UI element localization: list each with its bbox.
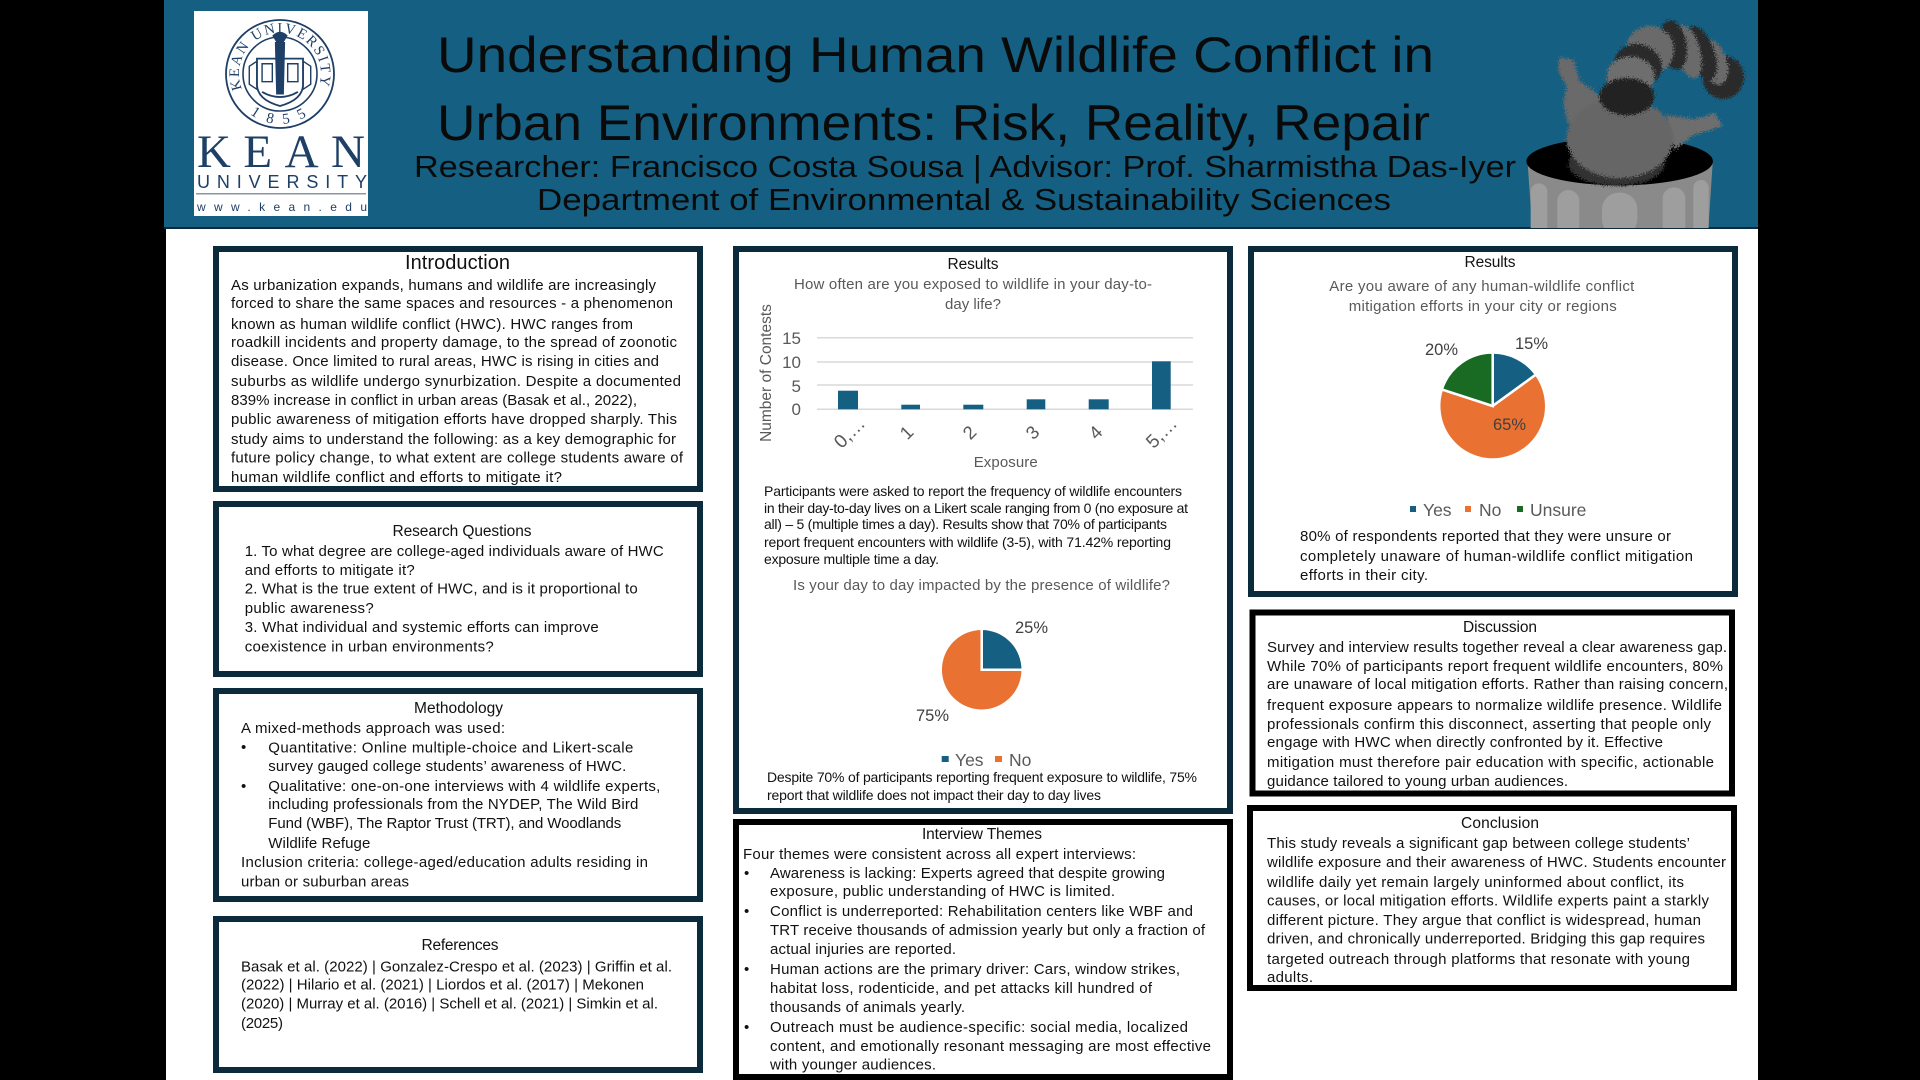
text: methodology body: including professionals from the NYDEP, The Wild Bird — [268, 796, 638, 813]
heading: interview themes: Interview Themes — [922, 826, 1042, 843]
text: discussion body: Survey and interview results together reveal a clear awareness gap. — [1267, 639, 1727, 656]
text: discussion body: engage with HWC when directly confronted by it. Effective — [1267, 734, 1663, 751]
bar chart: exposure to wildlife: 3 — [1021, 421, 1043, 443]
text: interview themes list: exposure, public understanding of HWC is limited. — [770, 883, 1115, 900]
heading: methodology: Methodology — [414, 700, 503, 717]
bar chart: exposure to wildlife: 15 — [782, 329, 801, 348]
heading: research questions: Research Questions — [392, 523, 532, 540]
text: methodology body: A mixed-methods approach was used: — [241, 720, 505, 737]
text: conclusion body — [1266, 835, 1726, 986]
text: exposure findings: Participants were asked to report the frequency of wildlife encounters — [764, 483, 1182, 499]
text: interview themes list: Outreach must be audience-specific: social media, localized — [770, 1019, 1188, 1036]
text: discussion body: While 70% of participants report frequent wildlife encounters, 80% — [1267, 658, 1723, 675]
text: interview themes list: Conflict is underreported: Rehabilitation centers like WBF and — [770, 903, 1193, 920]
text: conclusion body: targeted outreach through platforms that resonate with young — [1267, 951, 1690, 968]
text: methodology body: • — [241, 778, 246, 795]
heading: introduction: Introduction — [405, 252, 510, 274]
logo: Kean University: KEAN UNIVERSITY — [229, 23, 331, 92]
text: introduction body: 839% increase in conflict in urban areas (Basak et al., 2022), — [231, 392, 637, 409]
bar chart: exposure to wildlife — [758, 276, 1193, 471]
text: references list: (2025) — [241, 1015, 283, 1032]
text: references list — [241, 958, 672, 1032]
icon: raccoon in trash can — [1526, 18, 1744, 237]
text: introduction body: disease. Once limited to rural areas, HWC is rising in cities and — [231, 353, 659, 370]
text: impact findings — [767, 769, 1197, 803]
text: methodology body: Inclusion criteria: college-aged/education adults residing in — [241, 854, 648, 871]
text: introduction body: human wildlife conflict and efforts to mitigate it? — [231, 469, 562, 486]
panel: discussion — [1252, 612, 1732, 794]
text: methodology body — [241, 720, 660, 890]
text: methodology body: Wildlife Refuge — [268, 835, 370, 852]
text: references list: (2020) | Murray et al. (2016) | Schell et al. (2021) | Simkin et al. — [241, 996, 658, 1012]
text: interview themes list: actual injuries are reported. — [770, 941, 956, 958]
bar chart: exposure to wildlife: Exposure — [974, 454, 1038, 471]
text: introduction body: As urbanization expands, humans and wildlife are increasingly — [231, 277, 656, 294]
text: discussion body: are unaware of local mitigation efforts. Rather than raising concern, — [1267, 676, 1728, 693]
title: Understanding Human Wildlife Conflict in — [437, 27, 1434, 83]
text: interview themes list: Awareness is lacking: Experts agreed that despite growing — [770, 865, 1165, 882]
heading: conclusion: Conclusion — [1461, 815, 1539, 832]
text: interview themes list — [743, 846, 1211, 1074]
pie chart: mitigation awareness: Are you aware of any human-wildlife conflict — [1329, 278, 1635, 295]
title — [437, 27, 1434, 151]
text: research questions list: 3. What individual and systemic efforts can improve — [245, 619, 599, 636]
text: discussion body — [1267, 639, 1728, 790]
text: methodology body: survey gauged college students’ awareness of HWC. — [268, 758, 626, 775]
logo: Kean University: UNIVERSITY — [197, 172, 367, 192]
text: discussion body: professionals confirm this disconnect, asserting that people only — [1267, 716, 1712, 733]
text: introduction body: suburbs as wildlife undergo synurbization. Despite a documented — [231, 373, 681, 390]
text: interview themes list: • — [744, 903, 749, 920]
bar chart: exposure to wildlife: 4 — [1084, 421, 1106, 443]
text: exposure findings: in their day-to-day lives on a Likert scale ranging from 0 (no exposure at — [764, 500, 1188, 516]
panel: introduction — [216, 249, 700, 489]
researcher and department subtitle: Department of Environmental & Sustainability Sciences — [537, 182, 1391, 217]
text: exposure findings — [764, 483, 1188, 567]
text: methodology body: • — [241, 739, 246, 756]
text: research questions list: 1. To what degree are college-aged individuals aware of HWC — [245, 543, 664, 560]
text: methodology body: Quantitative: Online multiple-choice and Likert-scale — [268, 740, 633, 756]
pie chart: mitigation awareness: 65% — [1493, 416, 1526, 434]
bar chart: exposure to wildlife: 2 — [958, 421, 980, 443]
text: impact findings: report that wildlife does not impact their day to day lives — [767, 787, 1101, 803]
text: conclusion body: adults. — [1267, 969, 1313, 986]
text: exposure findings: all) – 5 (multiple times a day). Results show that 70% of participants — [764, 516, 1167, 532]
pie chart: mitigation awareness: 20% — [1425, 341, 1458, 359]
pie chart: mitigation awareness: mitigation efforts in your city or regions — [1349, 298, 1617, 315]
pie chart: daily impact: Yes — [955, 750, 984, 770]
bar chart: exposure to wildlife: Number of Contests — [758, 304, 775, 442]
text: conclusion body: different picture. They argue that conflict is widespread, human — [1267, 912, 1701, 929]
logo: Kean University: www.kean.edu — [196, 200, 367, 214]
panel: research questions — [216, 504, 700, 674]
text: interview themes list: • — [744, 961, 749, 978]
text: discussion body: mitigation must therefore pair education with specific, actionable — [1267, 754, 1714, 771]
text: conclusion body: causes, or local mitigation efforts. Wildlife experts paint a starkly — [1267, 892, 1710, 910]
text: methodology body: urban or suburban areas — [241, 874, 409, 890]
panel: conclusion — [1250, 808, 1734, 988]
text: interview themes list: • — [744, 865, 749, 882]
text: awareness findings: completely unaware of human-wildlife conflict mitigation — [1300, 548, 1693, 565]
text: interview themes list: TRT receive thousands of admission yearly but only a fraction of — [770, 922, 1206, 939]
bar chart: exposure to wildlife: 5,… — [1142, 413, 1182, 453]
pie chart: daily impact: No — [1009, 750, 1031, 770]
pie chart: mitigation awareness: Unsure — [1530, 500, 1586, 520]
text: references list: Basak et al. (2022) | Gonzalez-Crespo et al. (2023) | Griffin et al. — [241, 958, 672, 976]
pie chart: daily impact — [793, 577, 1170, 770]
pie chart: daily impact: 75% — [916, 707, 949, 725]
text: interview themes list: thousands of animals yearly. — [770, 999, 965, 1016]
text: interview themes list: • — [744, 1019, 749, 1036]
text: awareness findings: efforts in their city. — [1300, 567, 1428, 584]
text: methodology body: Qualitative: one-on-one interviews with 4 wildlife experts, — [268, 778, 660, 795]
text: introduction body: known as human wildlife conflict (HWC). HWC ranges from — [231, 316, 633, 333]
text: conclusion body: wildlife exposure and their awareness of HWC. Students encounter — [1266, 854, 1726, 871]
researcher and department subtitle: Researcher: Francisco Costa Sousa | Advisor: Prof. Sharmistha Das-Iyer — [414, 149, 1516, 184]
bar chart: exposure to wildlife: 1 — [895, 421, 917, 443]
text: conclusion body: driven, and chronically underreported. Bridging this gap requires — [1267, 930, 1705, 948]
text: exposure findings: exposure multiple time a day. — [764, 551, 939, 567]
text: introduction body: public awareness of mitigation efforts have dropped sharply. This — [231, 411, 677, 428]
bar chart: exposure to wildlife: 10 — [782, 353, 801, 372]
panel: methodology — [216, 691, 700, 899]
header banner — [164, 0, 1758, 229]
text: research questions list: and efforts to mitigate it? — [245, 562, 415, 579]
logo: Kean University — [194, 11, 368, 216]
text: research questions list: 2. What is the true extent of HWC, and is it proportional to — [245, 580, 638, 598]
text: references list: (2022) | Hilario et al. (2021) | Liordos et al. (2017) | Mekonen — [241, 976, 644, 994]
heading: discussion: Discussion — [1463, 619, 1537, 636]
text: introduction body: forced to share the same spaces and resources - a phenomenon — [231, 295, 673, 312]
pie chart: mitigation awareness: 15% — [1515, 335, 1548, 353]
text: exposure findings: report frequent encounters with wildlife (3-5), with 71.42% reporting — [764, 534, 1171, 550]
panel: results exposure and impact — [736, 249, 1230, 811]
logo: Kean University: KEAN — [197, 126, 365, 178]
panel: interview themes — [736, 822, 1230, 1077]
researcher and department subtitle — [414, 149, 1516, 217]
text: impact findings: Despite 70% of participants reporting frequent exposure to wildlife, 75% — [767, 769, 1197, 785]
pie chart: mitigation awareness: Yes — [1423, 500, 1452, 520]
pie chart: daily impact: Is your day to day impacted by the presence of wildlife? — [793, 577, 1170, 594]
logo: Kean University: 1855 — [251, 108, 306, 124]
bar chart: exposure to wildlife: How often are you exposed to wildlife in your day-to- — [794, 276, 1152, 293]
text: awareness findings — [1300, 528, 1693, 584]
title: Urban Environments: Risk, Reality, Repair — [437, 95, 1430, 151]
text: discussion body: frequent exposure appears to normalize wildlife presence. Wildlife — [1267, 697, 1722, 714]
text: introduction body: roadkill incidents and property damage, to the spread of zoonotic — [231, 334, 678, 351]
text: research questions list: public awareness? — [245, 600, 374, 617]
text: research questions list — [245, 543, 664, 656]
heading: results: Results — [1464, 254, 1516, 271]
panel: references — [216, 919, 700, 1070]
bar chart: exposure to wildlife: 0 — [792, 400, 801, 419]
bar chart: exposure to wildlife: day life? — [945, 296, 1001, 313]
bar chart: exposure to wildlife: 5 — [792, 377, 801, 396]
text: interview themes list: Four themes were consistent across all expert interviews: — [743, 846, 1136, 863]
text: interview themes list: with younger audiences. — [769, 1056, 936, 1074]
pie chart: mitigation awareness: No — [1479, 500, 1501, 520]
pie chart: mitigation awareness — [1329, 278, 1635, 520]
text: conclusion body: This study reveals a significant gap between college students’ — [1267, 835, 1690, 852]
heading: references: References — [422, 937, 499, 954]
text: introduction body: future policy change, to what extent are college students aware of — [231, 450, 684, 466]
text: research questions list: coexistence in urban environments? — [245, 638, 494, 656]
heading: results: Results — [948, 256, 999, 273]
panel: results awareness — [1251, 249, 1735, 594]
text: methodology body: Fund (WBF), The Raptor Trust (TRT), and Woodlands — [268, 815, 621, 832]
text: interview themes list: habitat loss, rodenticide, and pet attacks kill hundred of — [770, 980, 1153, 997]
text: discussion body: guidance tailored to young urban audiences. — [1267, 773, 1568, 790]
text: interview themes list: content, and emotionally resonant messaging are most effective — [770, 1038, 1211, 1055]
text: interview themes list: Human actions are the primary driver: Cars, window strikes, — [770, 961, 1180, 978]
text: awareness findings: 80% of respondents reported that they were unsure or — [1300, 528, 1671, 545]
text: introduction body: study aims to understand the following: as a key demographic for — [231, 431, 676, 448]
bar chart: exposure to wildlife: 0,… — [830, 413, 870, 453]
pie chart: daily impact: 25% — [1015, 619, 1048, 637]
text: conclusion body: wildlife daily yet remain largely uninformed about conflict, its — [1266, 874, 1684, 891]
text: introduction body — [231, 277, 684, 486]
